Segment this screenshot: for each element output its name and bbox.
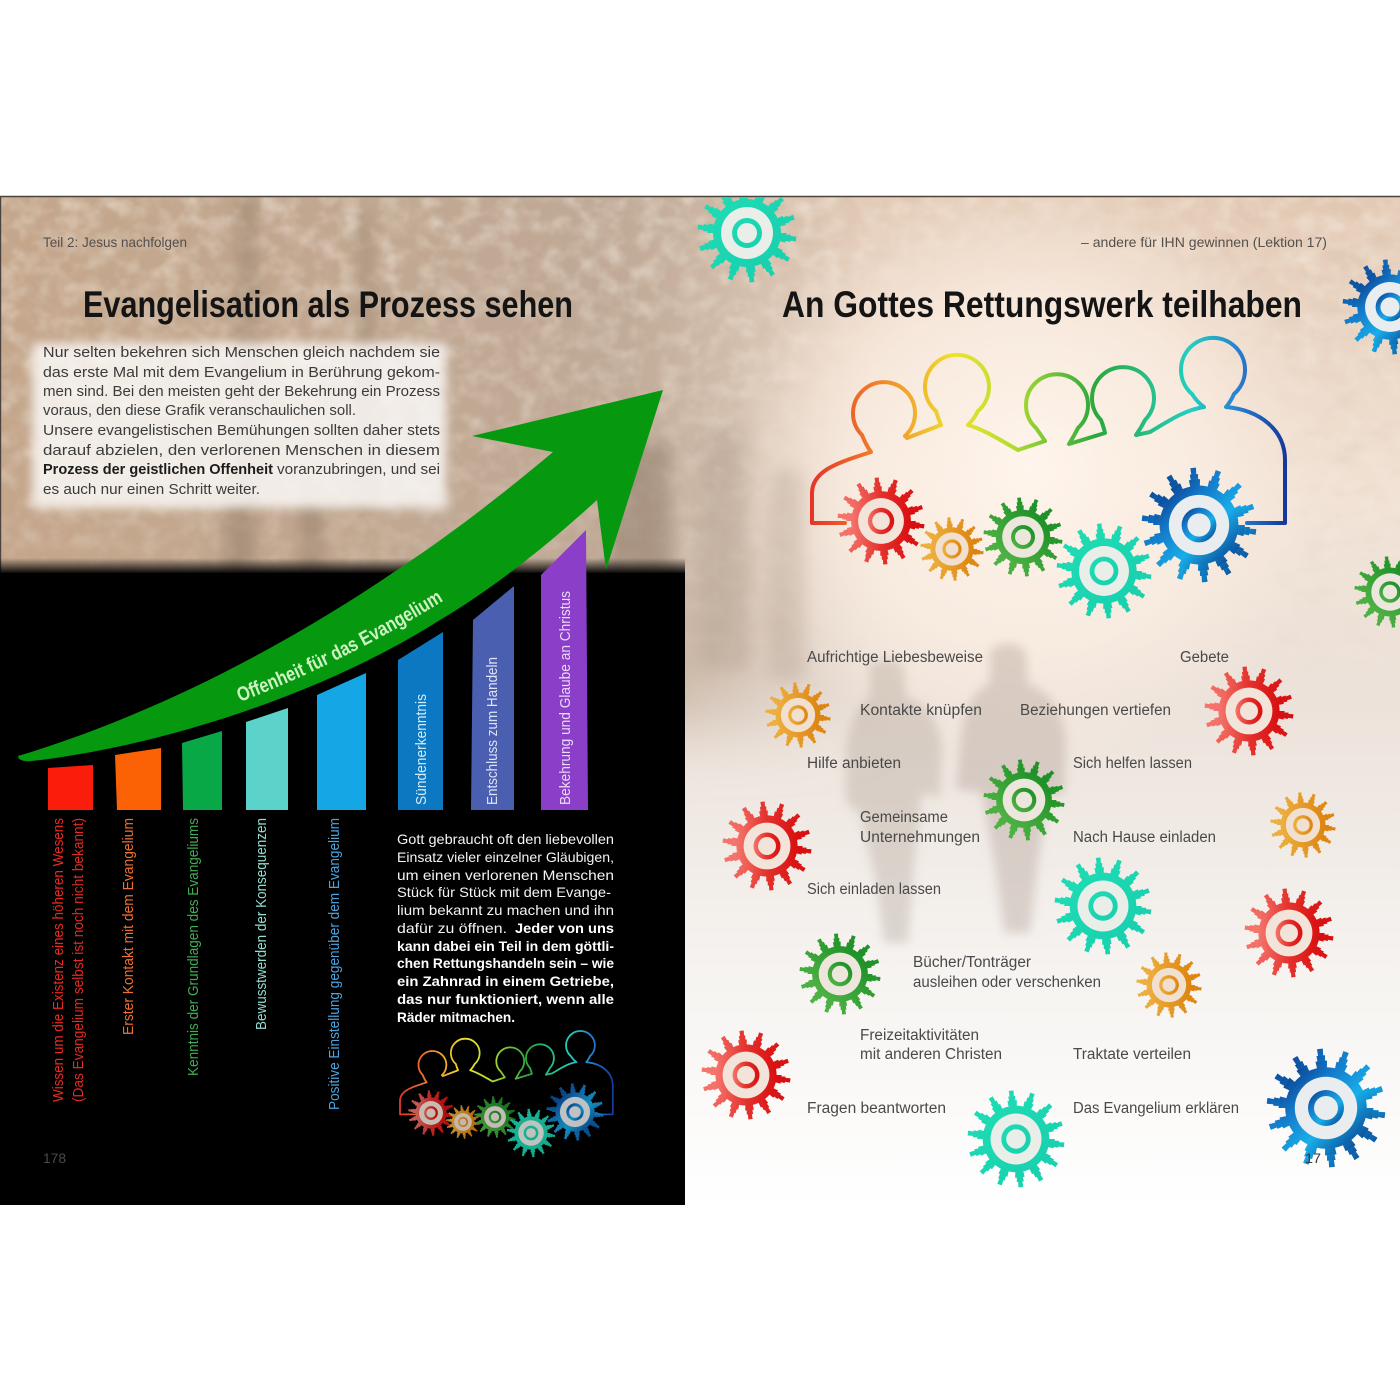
text block: intro paragraph: das erste Mal mit dem Evangelium in Berührung gekom- <box>43 364 440 381</box>
text block: cooperation paragraph: Räder mitmachen. <box>397 1009 515 1025</box>
list of activities: Freizeitaktivitäten <box>860 1027 979 1044</box>
text block: intro paragraph: voranzubringen, und sei <box>277 461 440 478</box>
list of activities: Unternehmungen <box>860 829 980 846</box>
title left: Evangelisation als Prozess sehen <box>83 284 573 325</box>
list of activities <box>807 649 1239 1117</box>
arrow: openness for the gospel <box>18 390 663 761</box>
text block: cooperation paragraph: Gott gebraucht oft den liebevollen <box>397 831 614 847</box>
text block: intro paragraph: Nur selten bekehren sich Menschen gleich nachdem sie <box>43 344 440 361</box>
icon: small people and gears <box>400 1031 613 1156</box>
page number right: 179 <box>1305 1150 1329 1166</box>
text block: cooperation paragraph: chen Rettungshandeln sein – wie <box>397 955 614 971</box>
header left: Teil 2: Jesus nachfolgen <box>43 234 187 250</box>
bar labels inside tall bars <box>414 591 574 805</box>
text block: intro paragraph: es auch nur einen Schritt weiter. <box>43 481 260 498</box>
icon: main gear row <box>840 471 1253 616</box>
bar labels below bars: Positive Einstellung gegenüber dem Evangelium <box>327 818 343 1110</box>
list of activities: Gemeinsame <box>860 809 948 826</box>
list of activities: Aufrichtige Liebesbeweise <box>807 649 983 666</box>
list of activities: Bücher/Tonträger <box>913 954 1031 971</box>
list of activities: mit anderen Christen <box>860 1046 1002 1063</box>
bar chart: steps of openness <box>48 530 588 810</box>
text block: cooperation paragraph: dafür zu öffnen. <box>397 920 507 936</box>
bar labels below bars: Bewusstwerden der Konsequenzen <box>254 818 270 1030</box>
text block: intro paragraph: Unsere evangelistischen Bemühungen sollten daher stets <box>43 422 440 439</box>
panel: black lower left background <box>0 558 685 1205</box>
text block: intro paragraph: Prozess der geistlichen Offenheit <box>43 461 273 478</box>
text block: cooperation paragraph: um einen verlorenen Menschen <box>397 867 614 883</box>
text block: intro paragraph: men sind. Bei den meisten geht der Bekehrung ein Prozess <box>43 383 440 400</box>
icon: rainbow people outline <box>812 338 1285 523</box>
title right: An Gottes Rettungswerk teilhaben <box>782 284 1302 325</box>
text block: intro paragraph: voraus, den diese Grafik veranschaulichen soll. <box>43 402 356 419</box>
arrow label: Offenheit für das Evangelium <box>237 593 443 700</box>
text block: cooperation paragraph: kann dabei ein Teil in dem göttli- <box>397 938 614 954</box>
text block: cooperation paragraph: Stück für Stück mit dem Evange- <box>397 884 611 900</box>
text block: intro paragraph <box>43 344 440 498</box>
bar labels below bars: Erster Kontakt mit dem Evangelium <box>121 818 137 1035</box>
list of activities: Fragen beantworten <box>807 1100 946 1117</box>
text block: cooperation paragraph: Einsatz vieler einzelner Gläubigen, <box>397 849 614 865</box>
bar labels inside tall bars: Bekehrung und Glaube an Christus <box>558 591 574 805</box>
list of activities: Sich einladen lassen <box>807 881 941 898</box>
list of activities: Das Evangelium erklären <box>1073 1100 1239 1117</box>
page frame <box>0 196 1400 1205</box>
list of activities: ausleihen oder verschenken <box>913 974 1101 991</box>
list of activities: Hilfe anbieten <box>807 755 901 772</box>
text block: cooperation paragraph: ein Zahnrad in einem Getriebe, <box>397 973 614 989</box>
bar labels below bars <box>51 818 343 1110</box>
list of activities: Beziehungen vertiefen <box>1020 702 1171 719</box>
bar labels below bars: Kenntnis der Grundlagen des Evangeliums <box>186 818 202 1076</box>
text block: cooperation paragraph <box>397 831 614 1025</box>
list of activities: Gebete <box>1180 649 1229 666</box>
list of activities: Kontakte knüpfen <box>860 702 982 719</box>
text block: intro paragraph: darauf abzielen, den verlorenen Menschen in diesem <box>43 442 440 459</box>
text block: cooperation paragraph: das nur funktioniert, wenn alle <box>397 991 614 1007</box>
panel: left page top text box <box>32 343 446 508</box>
page background: autumn forest photo <box>1 197 1400 1078</box>
text block: cooperation paragraph: lium bekannt zu machen und ihn <box>397 902 614 918</box>
bar labels below bars: (Das Evangelium selbst ist noch nicht bekannt) <box>71 818 87 1102</box>
bar labels inside tall bars: Sündenerkenntnis <box>414 694 430 805</box>
bar labels below bars: Wissen um die Existenz eines höheren Wesens <box>51 818 67 1102</box>
bar labels inside tall bars: Entschluss zum Handeln <box>485 657 501 805</box>
list of activities: Traktate verteilen <box>1073 1046 1191 1063</box>
header right: – andere für IHN gewinnen (Lektion 17) <box>1081 234 1327 250</box>
list of activities: Nach Hause einladen <box>1073 829 1216 846</box>
page number left: 178 <box>43 1150 66 1166</box>
text block: cooperation paragraph: Jeder von uns <box>515 920 614 936</box>
list of activities: Sich helfen lassen <box>1073 755 1192 772</box>
icon: scattered gears <box>700 186 1400 1185</box>
